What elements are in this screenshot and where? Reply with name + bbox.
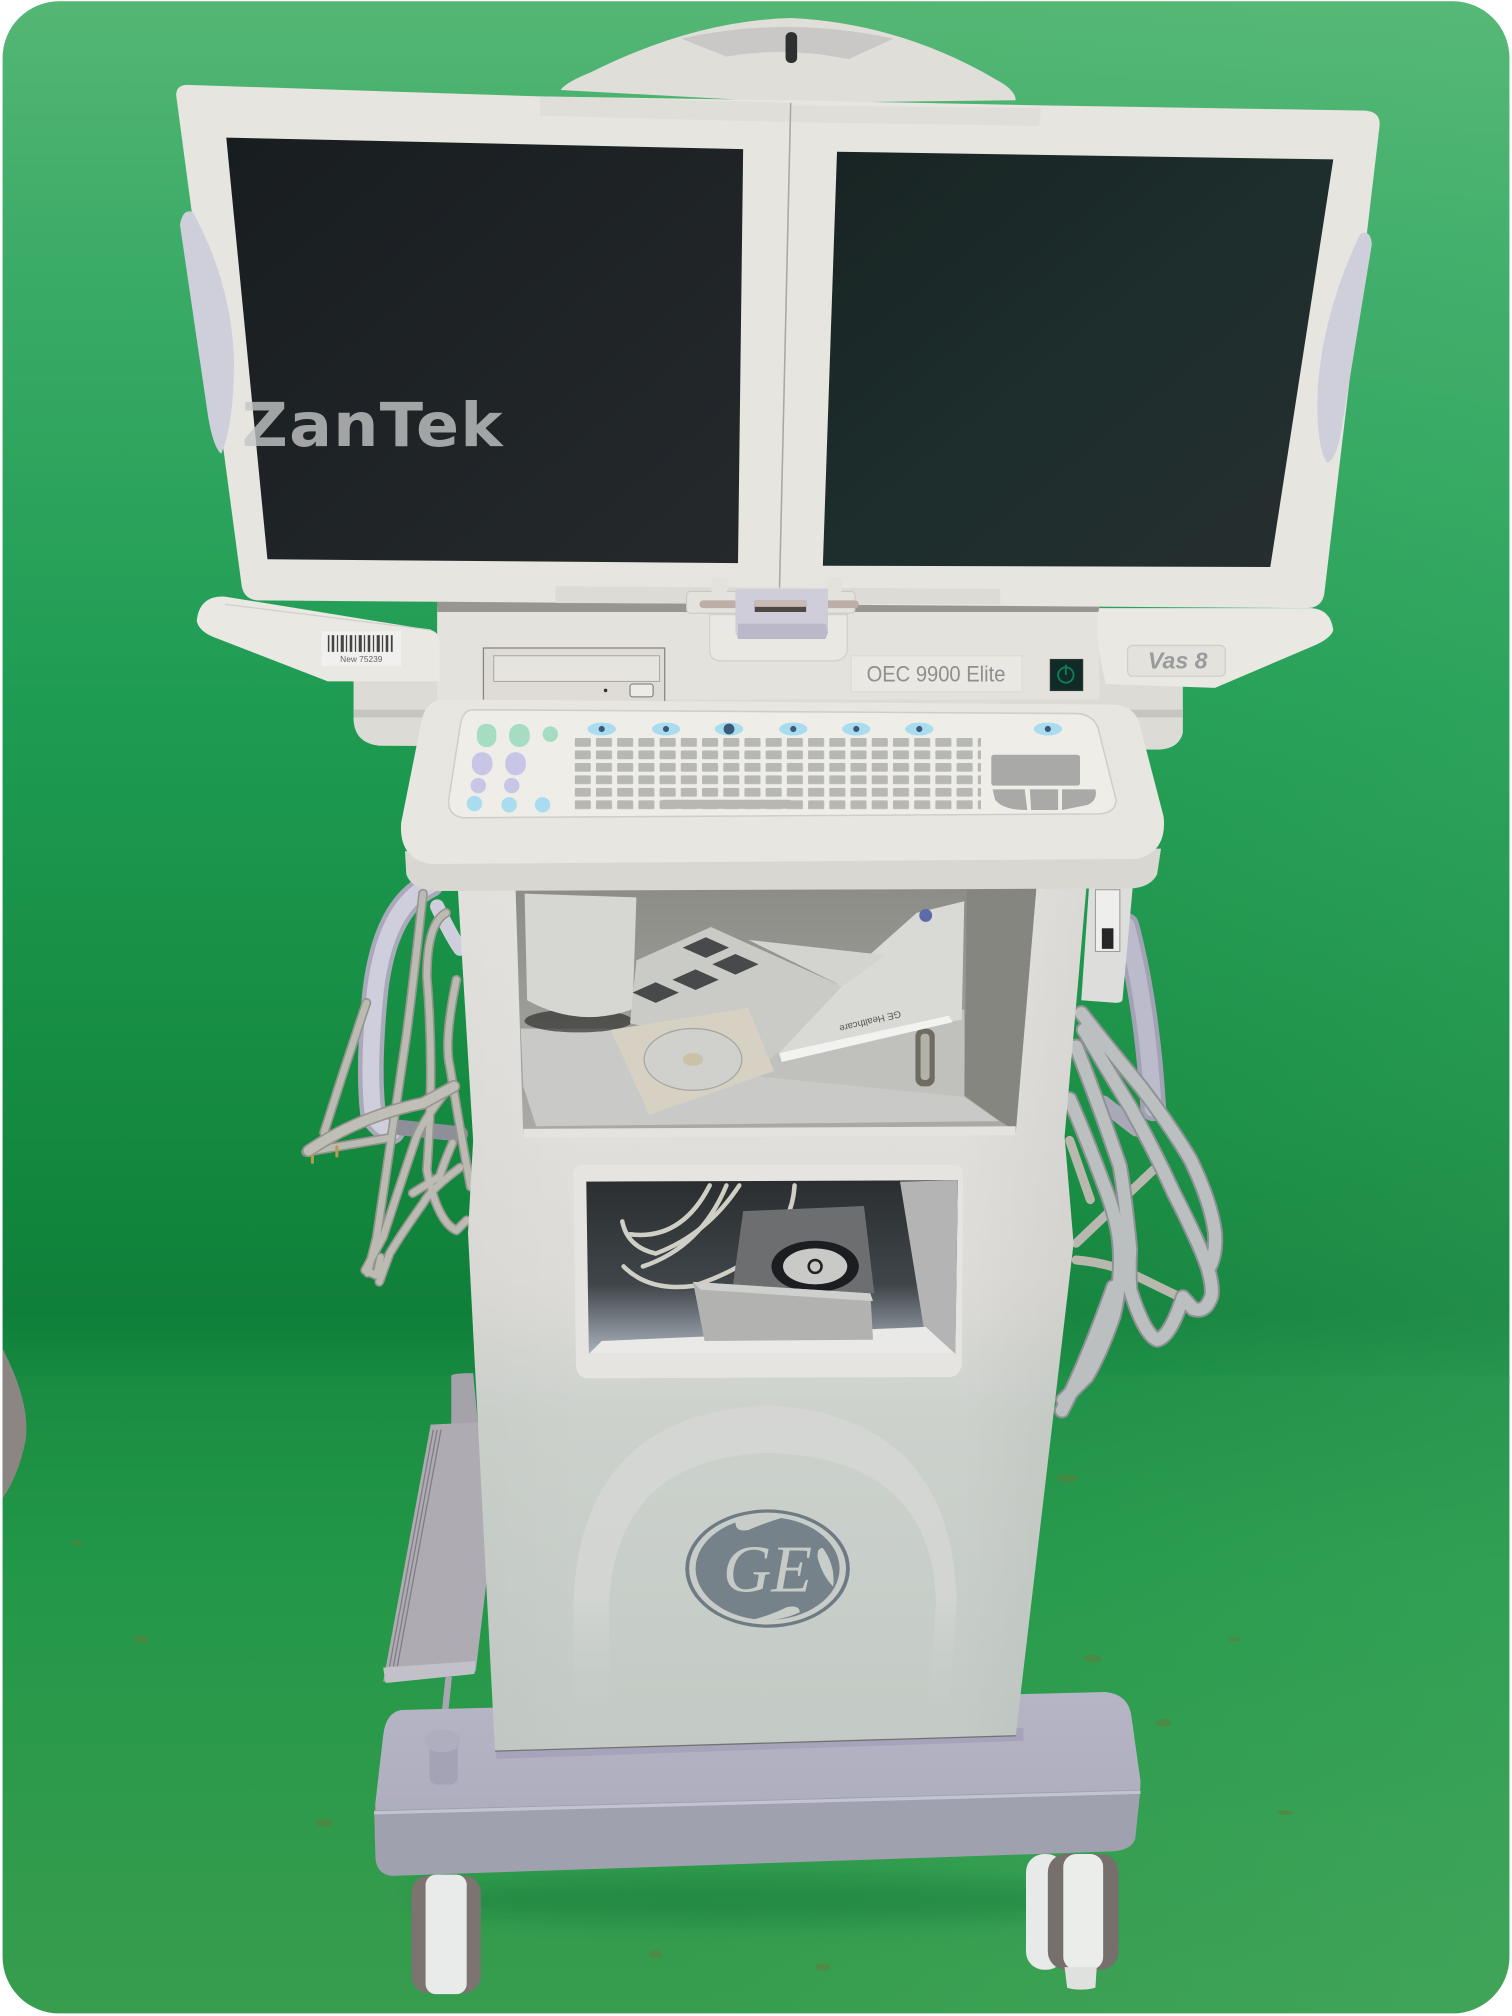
leaflets [630, 927, 886, 1053]
touchpad [991, 755, 1096, 810]
right cable strands [1062, 1013, 1215, 1410]
right thin straps [1070, 1140, 1180, 1297]
cart base [374, 1692, 1141, 1876]
right lavender handle [1103, 926, 1153, 1129]
cables: right bundle [1062, 926, 1215, 1410]
GE logo [685, 1509, 850, 1628]
GE logo: GE [723, 1533, 812, 1607]
cables: left bundle [306, 885, 471, 1282]
green buttons [477, 724, 558, 747]
CD sleeve [611, 1008, 774, 1115]
model label [1128, 645, 1225, 676]
purple buttons [471, 752, 526, 793]
space bar [662, 800, 791, 809]
upper storage compartment [516, 888, 1036, 1138]
foot switch [693, 1206, 874, 1341]
keyboard keys [575, 738, 981, 811]
paper roll [525, 894, 636, 1032]
product label [851, 656, 1022, 692]
control console [401, 699, 1164, 891]
lower compartment [573, 1165, 963, 1378]
display support shelf [197, 597, 1333, 750]
cart tower [458, 887, 1086, 1759]
left handle [180, 211, 234, 454]
product label: OEC 9900 Elite [867, 661, 1005, 686]
right wing [1097, 608, 1333, 688]
manual binder [755, 901, 964, 1097]
left screen [226, 138, 743, 563]
model label: Vas 8 [1148, 648, 1208, 674]
optical drive [483, 648, 665, 702]
wheel: left [411, 1875, 481, 1994]
left cable strands [306, 894, 471, 1282]
barcode sticker [321, 631, 401, 666]
arch panel [573, 1405, 957, 1723]
watermark: ZanTek [242, 391, 505, 461]
right screen [823, 152, 1333, 567]
power button [1050, 660, 1083, 690]
left lavender handle [371, 885, 460, 1134]
right monitor [779, 100, 1380, 608]
camera housing [561, 18, 1016, 103]
manual binder: GE Healthcare [838, 1008, 902, 1034]
blue buttons [467, 723, 1062, 813]
barcode sticker: New 75239 [340, 654, 383, 664]
foot pedal bar [383, 1373, 491, 1738]
side connector box [1081, 887, 1133, 1003]
left wing [197, 597, 440, 681]
hinge clip [687, 577, 859, 661]
right handle [1317, 233, 1372, 463]
wheels [411, 1854, 1119, 1994]
wheel: right [1026, 1854, 1119, 1990]
left monitor [176, 85, 791, 604]
console buttons [467, 723, 1062, 813]
exposed wire tips [312, 1147, 337, 1162]
internal cables [622, 1185, 795, 1287]
monitors [176, 18, 1380, 608]
knob on base [424, 1729, 460, 1785]
